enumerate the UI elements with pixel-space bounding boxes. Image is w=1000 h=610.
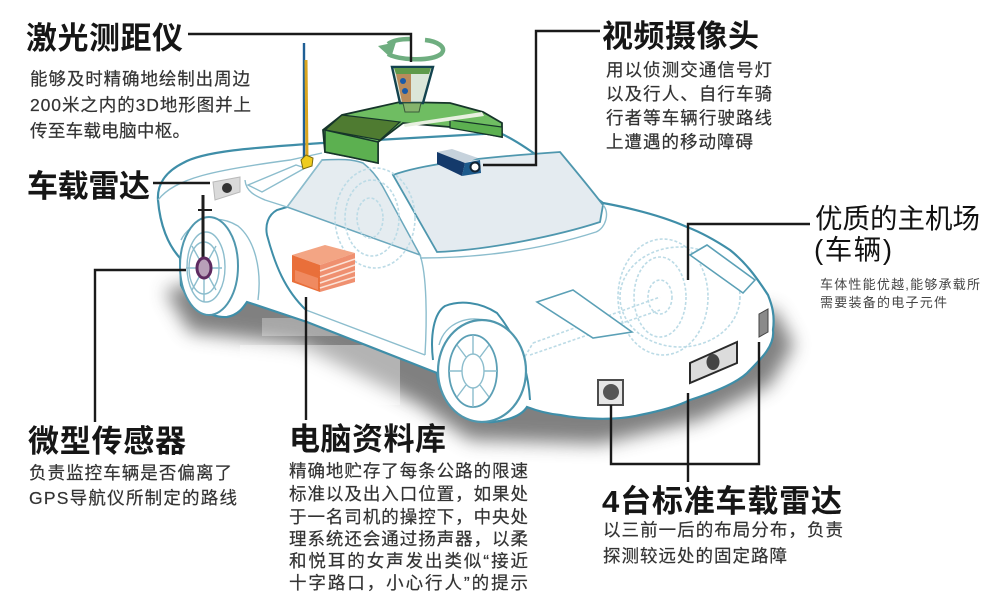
leader line: four radars <box>611 342 759 482</box>
label: four standard radars: 探测较远处的固定路障 <box>603 546 787 566</box>
label: video camera: 上遭遇的移动障碍 <box>606 132 753 152</box>
label: vehicle host: 优质的主机场 <box>815 203 980 234</box>
windshield <box>393 152 603 252</box>
label: video camera <box>602 19 772 152</box>
leader line: vehicle radar <box>153 182 210 184</box>
label: computer database: 于一名司机的操控下，中央处 <box>289 507 528 527</box>
micro sensor on rear wheel <box>197 195 212 278</box>
label: vehicle host: (车辆) <box>814 234 892 265</box>
label: micro sensor <box>28 424 237 508</box>
label: computer database: 十字路口，小心行人”的提示 <box>289 573 528 593</box>
leader line: computer database <box>305 297 307 420</box>
label: four standard radars: 4台标准车载雷达 <box>602 484 842 519</box>
label: video camera: 用以侦测交通信号灯 <box>606 60 772 80</box>
label: computer database: 和悦耳的女声发出类似“接近 <box>289 551 528 571</box>
label: four standard radars <box>602 484 843 566</box>
hood vent right <box>690 245 755 293</box>
car illustration <box>158 133 774 422</box>
body panel lines <box>158 153 740 365</box>
label: micro sensor: 负责监控车辆是否偏离了 <box>29 463 232 483</box>
leader line: vehicle <box>688 224 810 280</box>
label: video camera: 行者等车辆行驶路线 <box>606 108 772 128</box>
label: micro sensor: 微型传感器 <box>28 424 186 459</box>
side window <box>287 159 420 255</box>
label: micro sensor: GPS导航仪所制定的路线 <box>29 488 237 508</box>
front radar square <box>598 380 623 405</box>
antenna <box>301 43 313 169</box>
label: computer database: 电脑资料库 <box>289 422 446 457</box>
car ground shadow <box>165 260 794 444</box>
leader line: micro sensor <box>95 270 186 422</box>
rear wheel <box>180 217 259 315</box>
label: computer database: 精确地贮存了每条公路的限速 <box>289 461 528 481</box>
front wheel <box>432 303 530 422</box>
label: computer database <box>289 422 528 593</box>
label: video camera: 视频摄像头 <box>602 19 759 54</box>
label: vehicle host: 需要装备的电子元件 <box>820 295 947 310</box>
label: laser rangefinder: 激光测距仪 <box>26 21 183 56</box>
leader line: video camera <box>483 31 600 165</box>
label: vehicle host <box>814 203 980 310</box>
computer database box <box>292 245 355 292</box>
front radar wide <box>690 342 737 383</box>
laser rangefinder unit <box>392 67 433 112</box>
rear radar plate <box>213 177 240 200</box>
leader line: laser rangefinder <box>188 34 411 62</box>
side radar <box>759 309 768 337</box>
label: laser rangefinder: 200米之内的3D地形图并上 <box>30 95 251 115</box>
label: four standard radars: 以三前一后的布局分布，负责 <box>603 520 843 540</box>
label: computer database: 理系统还会通过扬声器，以柔 <box>289 529 528 549</box>
car body outline <box>158 133 774 422</box>
video camera <box>437 149 481 176</box>
label: vehicle host: 车体性能优越,能够承载所 <box>820 277 980 292</box>
icon: rotation arrow <box>378 39 443 59</box>
label: laser rangefinder: 传至车载电脑中枢。 <box>30 121 190 141</box>
laser rangefinder roof mount <box>323 102 502 163</box>
label: vehicle radar: 车载雷达 <box>27 169 150 204</box>
label: computer database: 标准以及出入口位置，如果处 <box>289 484 528 504</box>
label: laser rangefinder: 能够及时精确地绘制出周边 <box>30 69 250 89</box>
label: laser rangefinder <box>26 21 251 141</box>
hood vent left <box>537 290 632 338</box>
label: video camera: 以及行人、自行车骑 <box>606 84 772 104</box>
